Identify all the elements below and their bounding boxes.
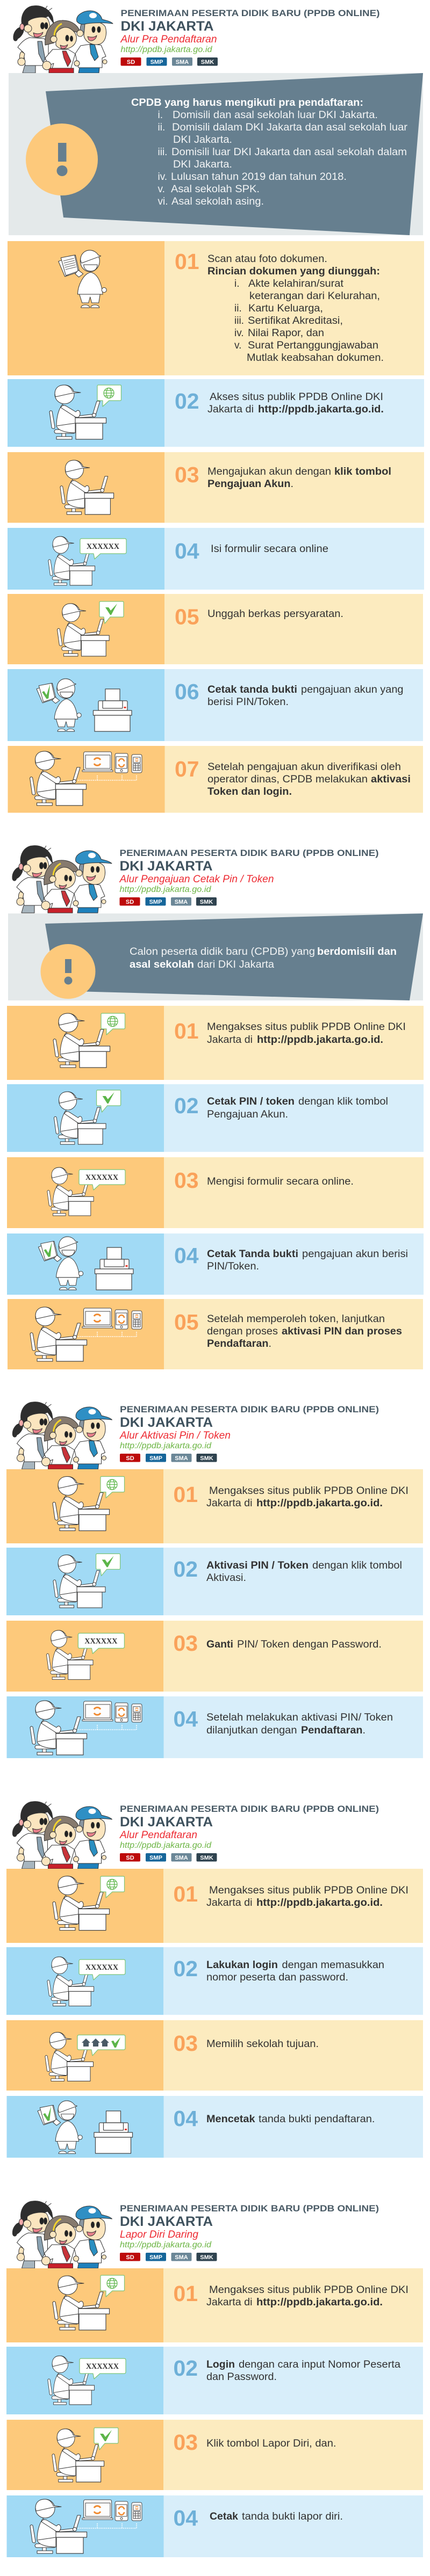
- icon: person at desk with check bubble: [58, 601, 124, 656]
- section 5: Lapor Diri Daring: [6, 2201, 423, 2557]
- callout text: dari DKI Jakarta: [197, 959, 274, 970]
- step text: [206, 1712, 393, 1736]
- callout text: [131, 97, 408, 207]
- step 04 panel: [6, 2495, 423, 2557]
- icon: person at desk with code bubble: [47, 1167, 125, 1216]
- icon: person at desk with check bubble: [53, 1554, 120, 1608]
- step text: Mencetak: [206, 2114, 255, 2125]
- icon: person at desk with globe bubble: [53, 1876, 125, 1931]
- badges: [119, 897, 217, 905]
- step text: Jakarta di: [206, 1897, 253, 1909]
- illustration: three students: [13, 6, 113, 73]
- number: 02: [173, 1956, 198, 1981]
- url: http://ppdb.jakarta.go.id: [119, 885, 212, 894]
- number: 02: [173, 2356, 198, 2381]
- badges: SMA: [175, 2254, 188, 2261]
- step text: iv.: [234, 328, 244, 339]
- badges: SD: [126, 1855, 134, 1861]
- step text: [206, 2284, 408, 2308]
- badges: SMA: [175, 1855, 188, 1861]
- heading: PENERIMAAN PESERTA DIDIK BARU (PPDB ONLINE): [120, 8, 379, 18]
- step text: Mengakses situs publik PPDB Online DKI: [207, 1021, 406, 1033]
- section 3: Alur Aktivasi Pin / Token: [6, 1402, 423, 1758]
- step text: Kartu Keluarga,: [248, 303, 323, 314]
- callout text: DKI Jakarta.: [173, 159, 232, 170]
- step text: [207, 1096, 388, 1120]
- step text: Setelah pengajuan akun diverifikasi oleh: [207, 761, 401, 773]
- step text: pengajuan akun berisi: [302, 1249, 408, 1260]
- number: 01: [173, 1482, 198, 1507]
- callout text: Lulusan tahun 2019 dan tahun 2018.: [171, 171, 347, 183]
- icon: person at desk with globe bubble: [53, 1477, 125, 1530]
- step text: Ganti: [206, 1639, 233, 1650]
- icon: person at desk with globe bubble: [53, 1013, 125, 1068]
- step text: Mengakses situs publik PPDB Online DKI: [209, 2284, 408, 2296]
- step text: PIN/Token.: [207, 1261, 259, 1272]
- step text: Mengakses situs publik PPDB Online DKI: [209, 1485, 408, 1497]
- step text: Mutlak keabsahan dokumen.: [247, 352, 384, 364]
- icon: person at desk with code bubble: XXXXXX: [85, 1963, 118, 1972]
- step text: keterangan dari Kelurahan,: [249, 291, 380, 302]
- icon: person at desk with globe bubble: [53, 2275, 125, 2330]
- step text: Cetak PIN / token: [207, 1096, 295, 1107]
- step text: Jakarta di: [206, 1498, 253, 1509]
- step 03 panel: [7, 1157, 424, 1228]
- badges: SD: [126, 1455, 134, 1462]
- step 04 panel: [8, 528, 424, 590]
- title: DKI JAKARTA: [120, 2214, 213, 2229]
- step text: [206, 2359, 400, 2383]
- url: http://ppdb.jakarta.go.id: [120, 2240, 212, 2250]
- badges: SMK: [200, 1855, 213, 1861]
- number: 07: [175, 757, 199, 781]
- number: 02: [173, 1557, 198, 1581]
- callout text: Domisili luar DKI Jakarta dan asal sekolah dalam: [171, 147, 407, 158]
- header section 5: [12, 2201, 379, 2268]
- step text: [207, 684, 403, 708]
- badges: [120, 1454, 217, 1462]
- step 04 panel: [6, 1696, 423, 1758]
- callout text: DKI Jakarta.: [173, 134, 232, 146]
- step text: Jakarta di: [207, 404, 254, 415]
- step 04 panel: [7, 1233, 424, 1295]
- step 01 panel: [6, 2268, 423, 2342]
- section 2: Alur Pengajuan Cetak Pin / Token: [7, 846, 424, 1369]
- badges: SMK: [200, 1455, 213, 1462]
- number: 03: [174, 1168, 199, 1193]
- step text: [206, 1485, 408, 1509]
- step text: [207, 761, 411, 797]
- callout text: [130, 946, 397, 970]
- step text: [207, 253, 384, 364]
- step 02 panel: [7, 1084, 424, 1152]
- step 05 panel: [8, 1299, 423, 1369]
- step text: Akte kelahiran/surat: [248, 278, 344, 289]
- callout: CPDB eligibility: [8, 913, 423, 1000]
- step text: Lakukan login: [206, 1960, 278, 1971]
- badges: SMK: [200, 2254, 213, 2261]
- callout text: CPDB yang harus mengikuti pra pendaftaran:: [131, 97, 363, 108]
- url: http://ppdb.jakarta.go.id: [120, 45, 213, 54]
- step 03 panel: [6, 1621, 423, 1692]
- step text: dengan memasukkan: [282, 1960, 384, 1971]
- step text: Cetak Tanda bukti: [207, 1249, 298, 1260]
- step text: http://ppdb.jakarta.go.id.: [257, 1034, 383, 1046]
- step text: tanda bukti lapor diri.: [242, 2511, 343, 2522]
- icon: person with approved document and printer: [38, 2101, 132, 2153]
- step text: dengan cara input Nomor Peserta: [239, 2359, 400, 2370]
- icon: person at desk with devices: [30, 1701, 142, 1755]
- icon: person at desk with code bubble: [47, 1630, 124, 1680]
- step text: Jakarta di: [207, 1034, 253, 1046]
- step text: Login: [206, 2359, 235, 2370]
- step text: pengajuan akun yang: [301, 684, 403, 695]
- step text: Nilai Rapor, dan: [248, 328, 324, 339]
- step text: [207, 1021, 406, 1046]
- icon: person at desk with code bubble: [48, 2356, 126, 2405]
- heading: PENERIMAAN PESERTA DIDIK BARU (PPDB ONLINE): [120, 1804, 379, 1814]
- step text: tanda bukti pendaftaran.: [259, 2114, 375, 2125]
- title: DKI JAKARTA: [119, 859, 213, 874]
- icon: person at desk with globe bubble: [49, 385, 121, 439]
- heading: PENERIMAAN PESERTA DIDIK BARU (PPDB ONLINE): [119, 848, 378, 858]
- callout text: Calon peserta didik baru (CPDB) yang: [130, 946, 315, 957]
- url: http://ppdb.jakarta.go.id: [120, 1841, 212, 1850]
- step text: Aktivasi.: [206, 1572, 246, 1584]
- icon: person at desk with code bubble: XXXXXX: [85, 1173, 118, 1182]
- step text: http://ppdb.jakarta.go.id.: [256, 2297, 383, 2308]
- step text: dengan klik tombol: [298, 1096, 388, 1107]
- icon: person at desk with code bubble: XXXXXX: [84, 1637, 118, 1645]
- section 4: Alur Pendaftaran: [6, 1802, 423, 2158]
- icon: warning circle: [26, 124, 98, 195]
- badges: SD: [127, 59, 135, 66]
- callout text: iii.: [158, 147, 167, 158]
- illustration: three students: [12, 846, 112, 913]
- step 02 panel: [8, 379, 424, 447]
- step text: dengan proses: [207, 1326, 278, 1337]
- badges: [120, 57, 218, 66]
- section 1: Alur Pra Pendaftaran: [8, 6, 424, 813]
- step 01 panel: [7, 1006, 424, 1080]
- illustration: three students: [12, 1802, 112, 1869]
- url: http://ppdb.jakarta.go.id: [120, 1441, 212, 1450]
- step text: Surat Pertanggungjawaban: [248, 340, 378, 351]
- step text: [207, 391, 384, 415]
- number: 03: [175, 462, 199, 487]
- step text: nomor peserta dan password.: [206, 1972, 348, 1983]
- step text: Pendaftaran.: [301, 1725, 366, 1736]
- step text: Klik tombol Lapor Diri, dan.: [206, 2438, 336, 2449]
- badges: SMP: [149, 899, 162, 905]
- step text: Unggah berkas persyaratan.: [207, 608, 343, 620]
- step text: [206, 2114, 375, 2125]
- callout text: asal sekolah: [130, 959, 194, 970]
- number: 04: [173, 2506, 198, 2530]
- badges: SMP: [149, 1855, 162, 1861]
- number: 04: [174, 1243, 199, 1268]
- step 07 panel: [8, 746, 423, 813]
- icon: person at desk with devices: [30, 751, 142, 806]
- callout text: v.: [158, 184, 165, 195]
- badges: SMK: [201, 59, 214, 66]
- number: 01: [173, 2281, 198, 2306]
- step 02 panel: [6, 2347, 423, 2414]
- illustration: three students: [12, 1402, 112, 1469]
- subtitle: Alur Aktivasi Pin / Token: [119, 1430, 231, 1441]
- step text: Mengakses situs publik PPDB Online DKI: [209, 1885, 408, 1896]
- callout text: i.: [158, 110, 163, 121]
- badges: SMA: [175, 899, 188, 905]
- title: DKI JAKARTA: [120, 1815, 213, 1830]
- step 03 panel: [6, 2420, 423, 2490]
- step 02 panel: [6, 1947, 423, 2015]
- step text: http://ppdb.jakarta.go.id.: [256, 1897, 383, 1909]
- step text: [207, 1249, 408, 1272]
- number: 01: [174, 1019, 199, 1043]
- icon: person at desk with devices: [30, 1307, 142, 1361]
- step 05 panel: [8, 594, 423, 664]
- callout text: vi.: [158, 196, 168, 207]
- step text: Scan atau foto dokumen.: [207, 253, 327, 265]
- subtitle: Alur Pra Pendaftaran: [120, 34, 217, 45]
- number: 01: [175, 249, 199, 274]
- step text: Jakarta di: [206, 2297, 253, 2308]
- illustration: three students: [12, 2201, 112, 2268]
- step text: Mengajukan akun dengan: [207, 466, 331, 477]
- step text: Cetak: [210, 2511, 238, 2522]
- subtitle: Lapor Diri Daring: [120, 2229, 198, 2240]
- step text: [207, 1314, 402, 1349]
- step text: PIN/ Token dengan Password.: [237, 1639, 382, 1650]
- step text: dilanjutkan dengan: [206, 1725, 297, 1736]
- step 02 panel: [6, 1548, 423, 1615]
- number: 02: [174, 1093, 199, 1118]
- step text: i.: [234, 278, 240, 289]
- icon: person at desk: [60, 460, 114, 514]
- step text: Pendaftaran.: [207, 1338, 271, 1349]
- icon: person at desk with code bubble: [48, 536, 126, 585]
- step text: Mengisi formulir secara online.: [207, 1176, 354, 1187]
- step text: v.: [234, 340, 241, 351]
- step text: Pengajuan Akun.: [207, 1109, 288, 1120]
- step 01 panel: [8, 241, 424, 375]
- badges: SMP: [150, 59, 163, 66]
- badges: SMP: [149, 1455, 162, 1462]
- header section 2: [12, 846, 379, 913]
- callout text: Asal sekolah SPK.: [171, 184, 260, 195]
- step text: [206, 1885, 408, 1909]
- step text: Rincian dokumen yang diunggah:: [207, 266, 380, 277]
- badges: [120, 1853, 217, 1861]
- number: 05: [174, 1310, 199, 1334]
- icon: person at desk with check bubble: [54, 1090, 121, 1144]
- step text: Token dan login.: [207, 786, 292, 797]
- callout: CPDB requirements: [9, 73, 423, 235]
- step 01 panel: [6, 1469, 423, 1543]
- step text: Cetak tanda bukti: [207, 684, 297, 695]
- icon: person at desk with code bubble: [47, 1957, 125, 2006]
- step text: Isi formulir secara online: [211, 543, 328, 555]
- step 03 panel: [8, 452, 424, 523]
- badges: SMA: [176, 59, 189, 66]
- step text: dengan klik tombol: [312, 1560, 402, 1571]
- step text: aktivasi PIN dan proses: [282, 1326, 402, 1337]
- step text: operator dinas, CPDB melakukan: [207, 774, 368, 785]
- heading: PENERIMAAN PESERTA DIDIK BARU (PPDB ONLINE): [120, 1404, 379, 1414]
- step text: http://ppdb.jakarta.go.id.: [256, 1498, 383, 1509]
- number: 04: [173, 1707, 198, 1731]
- step 01 panel: [6, 1869, 423, 1943]
- title: DKI JAKARTA: [120, 1415, 213, 1430]
- step text: Setelah melakukan aktivasi PIN/ Token: [206, 1712, 393, 1723]
- callout text: Asal sekolah asing.: [171, 196, 264, 207]
- callout text: berdomisili dan: [317, 946, 397, 957]
- icon: person holding document: [59, 250, 106, 308]
- header section 1: [13, 6, 380, 73]
- number: 05: [175, 605, 199, 629]
- step text: http://ppdb.jakarta.go.id.: [258, 404, 384, 415]
- callout text: ii.: [158, 122, 165, 133]
- step 06 panel: [8, 669, 423, 741]
- subtitle: Alur Pendaftaran: [119, 1830, 197, 1841]
- step text: dan Password.: [206, 2371, 277, 2383]
- step text: ii.: [234, 303, 242, 314]
- step text: [207, 466, 391, 490]
- title: DKI JAKARTA: [120, 19, 214, 34]
- badges: SMA: [175, 1455, 188, 1462]
- number: 06: [175, 679, 199, 704]
- step 04 panel: [6, 2096, 423, 2158]
- badges: SMP: [149, 2254, 162, 2261]
- number: 03: [173, 2430, 198, 2455]
- step text: iii.: [234, 315, 244, 326]
- icon: person at desk with school selection bubble: [45, 2032, 125, 2081]
- header section 4: [12, 1802, 379, 1869]
- heading: PENERIMAAN PESERTA DIDIK BARU (PPDB ONLINE): [120, 2203, 379, 2214]
- step text: Aktivasi PIN / Token: [206, 1560, 309, 1571]
- step text: Sertifikat Akreditasi,: [248, 315, 343, 326]
- number: 03: [173, 1631, 198, 1656]
- step text: [206, 1560, 402, 1584]
- icon: person with approved document and printer: [38, 1237, 133, 1290]
- badges: SD: [126, 899, 134, 905]
- step text: Pengajuan Akun .: [207, 478, 293, 490]
- step text: klik tombol: [334, 466, 391, 477]
- icon: person at desk with devices: [30, 2499, 142, 2553]
- badges: SD: [126, 2254, 134, 2261]
- badges: SMK: [200, 899, 213, 905]
- step 03 panel: [6, 2020, 423, 2091]
- callout text: Domisili dalam DKI Jakarta dan asal sekolah luar: [172, 122, 408, 133]
- callout text: Domisili dan asal sekolah luar DKI Jakarta.: [173, 110, 378, 121]
- icon: warning circle: [41, 944, 96, 999]
- badges: [120, 2253, 217, 2261]
- number: 01: [173, 1882, 198, 1906]
- step text: Memilih sekolah tujuan.: [206, 2038, 319, 2050]
- subtitle: Alur Pengajuan Cetak Pin / Token: [119, 874, 274, 885]
- number: 04: [173, 2106, 198, 2131]
- callout text: iv.: [158, 171, 167, 183]
- icon: person at desk with code bubble: XXXXXX: [87, 542, 119, 551]
- step text: berisi PIN/Token.: [207, 696, 289, 708]
- number: 02: [175, 389, 199, 413]
- number: 04: [175, 539, 199, 563]
- step text: Setelah memperoleh token, lanjutkan: [207, 1314, 385, 1325]
- step text: aktivasi: [371, 774, 411, 785]
- step text: Akses situs publik PPDB Online DKI: [210, 391, 383, 403]
- number: 03: [173, 2031, 198, 2056]
- icon: person with approved document and printer: [37, 679, 132, 731]
- step text: [206, 1960, 384, 1983]
- icon: person at desk with check bubble: [52, 2428, 118, 2482]
- header section 3: [12, 1402, 379, 1469]
- icon: person at desk with code bubble: XXXXXX: [86, 2362, 119, 2371]
